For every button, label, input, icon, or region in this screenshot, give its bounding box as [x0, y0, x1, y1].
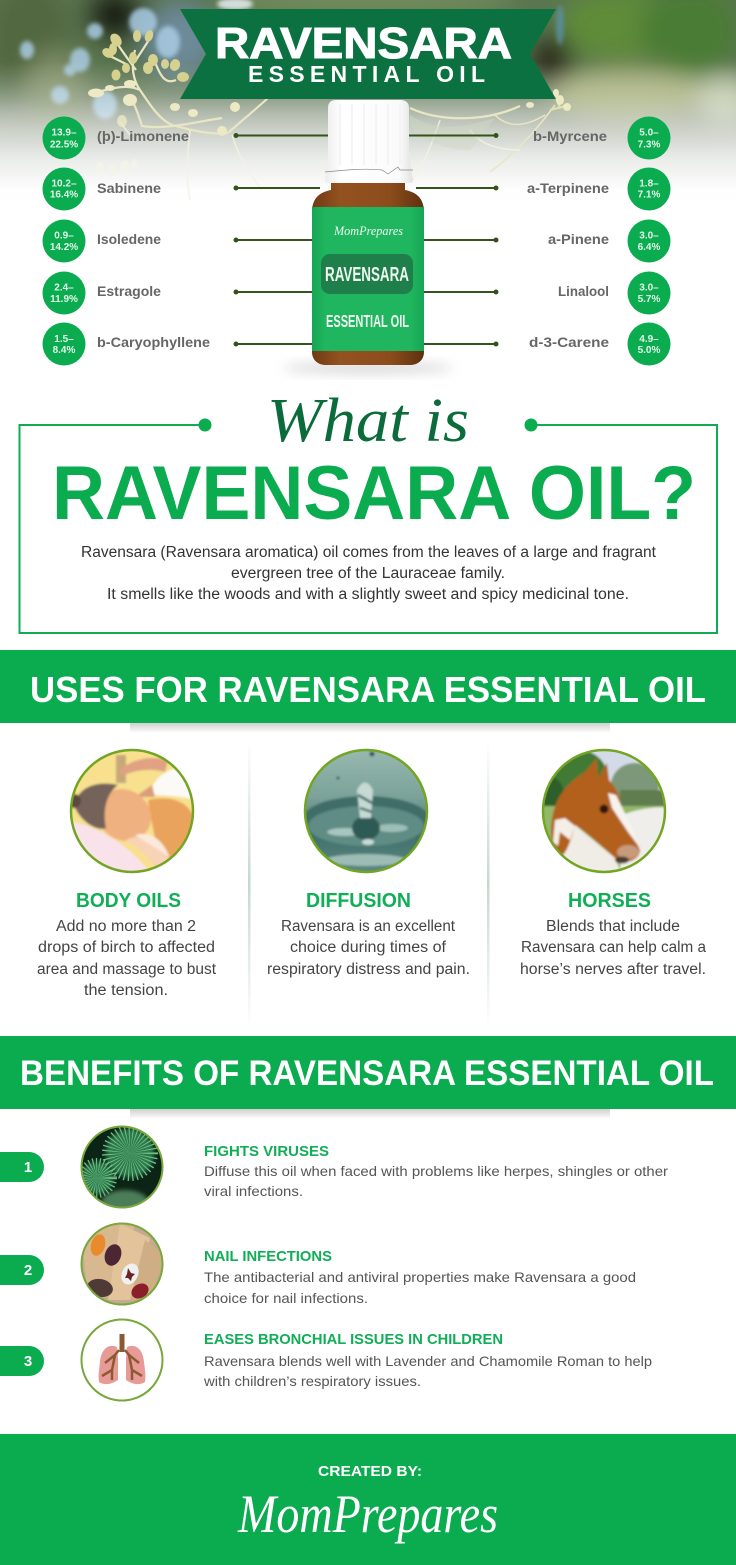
right compound list: a-Pinene — [548, 231, 609, 247]
bottle — [283, 100, 453, 374]
use: horses: HORSES — [568, 890, 651, 912]
use: body oils — [37, 749, 217, 999]
benefit 3: Ravensara blends well with Lavender and Chamomile Roman to help — [204, 1353, 652, 1369]
left compound list: 10.2– — [51, 178, 77, 190]
left compound list: Estragole — [97, 283, 161, 299]
connector lines — [234, 133, 498, 346]
number tab 2: 2 — [24, 1262, 32, 1279]
left compound list: 11.9% — [50, 294, 78, 305]
number tab 3 — [0, 1346, 44, 1376]
use: diffusion: DIFFUSION — [306, 890, 411, 912]
left compound list: 1.5– — [54, 334, 74, 345]
use: horses: Ravensara can help calm a — [521, 939, 706, 956]
what is script heading: What is — [267, 387, 469, 455]
right compound list: 7.1% — [638, 190, 661, 200]
left compound list: 16.4% — [50, 190, 78, 200]
left compound list: 22.5% — [50, 140, 78, 150]
left compound list — [42, 116, 210, 366]
left compound list: Sabinene — [97, 180, 161, 196]
use: horses — [520, 749, 706, 978]
title banner: ESSENTIAL OIL — [248, 61, 485, 87]
benefits banner — [0, 1036, 736, 1119]
use: diffusion: respiratory distress and pain. — [267, 961, 470, 978]
footer: CREATED BY: — [318, 1463, 422, 1480]
left compound list: 13.9– — [51, 128, 77, 138]
right compound list: 5.7% — [638, 294, 661, 305]
right compound list: a-Terpinene — [527, 180, 609, 196]
use: body oils: Add no more than 2 — [56, 918, 196, 935]
right compound list: 4.9– — [639, 334, 659, 345]
right compound list: 5.0– — [639, 128, 659, 138]
right compound list: d-3-Carene — [529, 334, 609, 350]
use: horses: horse’s nerves after travel. — [520, 961, 706, 978]
number tab 3: 3 — [24, 1353, 32, 1370]
use: body oils: drops of birch to affected — [38, 939, 215, 956]
right compound list — [527, 116, 670, 366]
heading: Ravensara oil: RAVENSARA OIL? — [52, 451, 696, 536]
title banner — [180, 9, 556, 99]
right compound list: 7.3% — [638, 140, 661, 150]
benefit 3: with children’s respiratory issues. — [203, 1373, 421, 1389]
right compound list: 5.0% — [638, 345, 661, 356]
left compound list: 8.4% — [53, 345, 76, 356]
bottle: ESSENTIAL OIL — [326, 311, 409, 331]
left compound list: (þ)-Limonene — [97, 128, 189, 144]
photo: nails — [82, 1220, 165, 1304]
left compound list: 0.9– — [54, 230, 74, 242]
uses banner: USES FOR RAVENSARA ESSENTIAL OIL — [30, 669, 706, 710]
photo: massage — [67, 749, 196, 875]
benefit 1: viral infections. — [204, 1183, 303, 1199]
number tab 1: 1 — [24, 1159, 32, 1176]
left compound list: 14.2% — [50, 242, 78, 253]
photo: water drop — [302, 749, 430, 873]
bottle: RAVENSARA — [325, 264, 409, 286]
use: horses: Blends that include — [546, 918, 680, 935]
right compound list: 3.0– — [639, 230, 659, 242]
uses banner — [0, 650, 736, 733]
photo: horse — [542, 748, 666, 874]
icon: lungs — [82, 1320, 162, 1400]
benefit 1 — [0, 1126, 668, 1216]
description text: evergreen tree of the Lauraceae family. — [231, 565, 505, 582]
right compound list: 3.0– — [639, 282, 659, 294]
benefit 3 — [0, 1320, 652, 1400]
what is frame — [20, 418, 717, 633]
benefit 1: FIGHTS VIRUSES — [204, 1143, 329, 1160]
number tab 1 — [0, 1152, 44, 1182]
description text — [81, 544, 657, 603]
title banner: RAVENSARA — [215, 19, 512, 68]
footer: MomPrepares — [237, 1484, 498, 1544]
left compound list: b-Caryophyllene — [97, 334, 210, 350]
benefit 2: NAIL INFECTIONS — [204, 1248, 332, 1265]
benefits banner: BENEFITS OF RAVENSARA ESSENTIAL OIL — [20, 1054, 714, 1093]
right compound list: 6.4% — [638, 242, 661, 253]
use: diffusion: Ravensara is an excellent — [281, 918, 456, 935]
benefit 2: choice for nail infections. — [204, 1290, 368, 1306]
benefit 3: EASES BRONCHIAL ISSUES IN CHILDREN — [204, 1331, 503, 1348]
benefit 2: The antibacterial and antiviral properties make Ravensara a good — [204, 1269, 636, 1285]
bottle: MomPrepares — [333, 223, 403, 238]
use: body oils: the tension. — [84, 982, 168, 999]
description text: Ravensara (Ravensara aromatica) oil comes from the leaves of a large and fragrant — [81, 544, 657, 561]
benefit 1: Diffuse this oil when faced with problems like herpes, shingles or other — [204, 1163, 668, 1179]
description text: It smells like the woods and with a slightly sweet and spicy medicinal tone. — [107, 586, 629, 603]
photo: virus — [81, 1126, 162, 1216]
benefit 2 — [0, 1220, 636, 1306]
footer — [0, 1434, 736, 1565]
right compound list: 1.8– — [639, 178, 659, 190]
flower branches — [88, 29, 571, 200]
right compound list: b-Myrcene — [533, 128, 607, 144]
column dividers — [248, 738, 490, 1030]
hero photo background: blurred foliage — [0, 0, 736, 180]
left compound list: Isoledene — [97, 231, 161, 247]
use: diffusion: choice during times of — [290, 939, 447, 956]
left compound list: 2.4– — [54, 282, 74, 294]
right compound list: Linalool — [558, 283, 609, 299]
number tab 2 — [0, 1255, 44, 1285]
use: body oils: area and massage to bust — [37, 961, 217, 978]
use: diffusion — [267, 749, 470, 978]
use: body oils: BODY OILS — [76, 890, 181, 912]
